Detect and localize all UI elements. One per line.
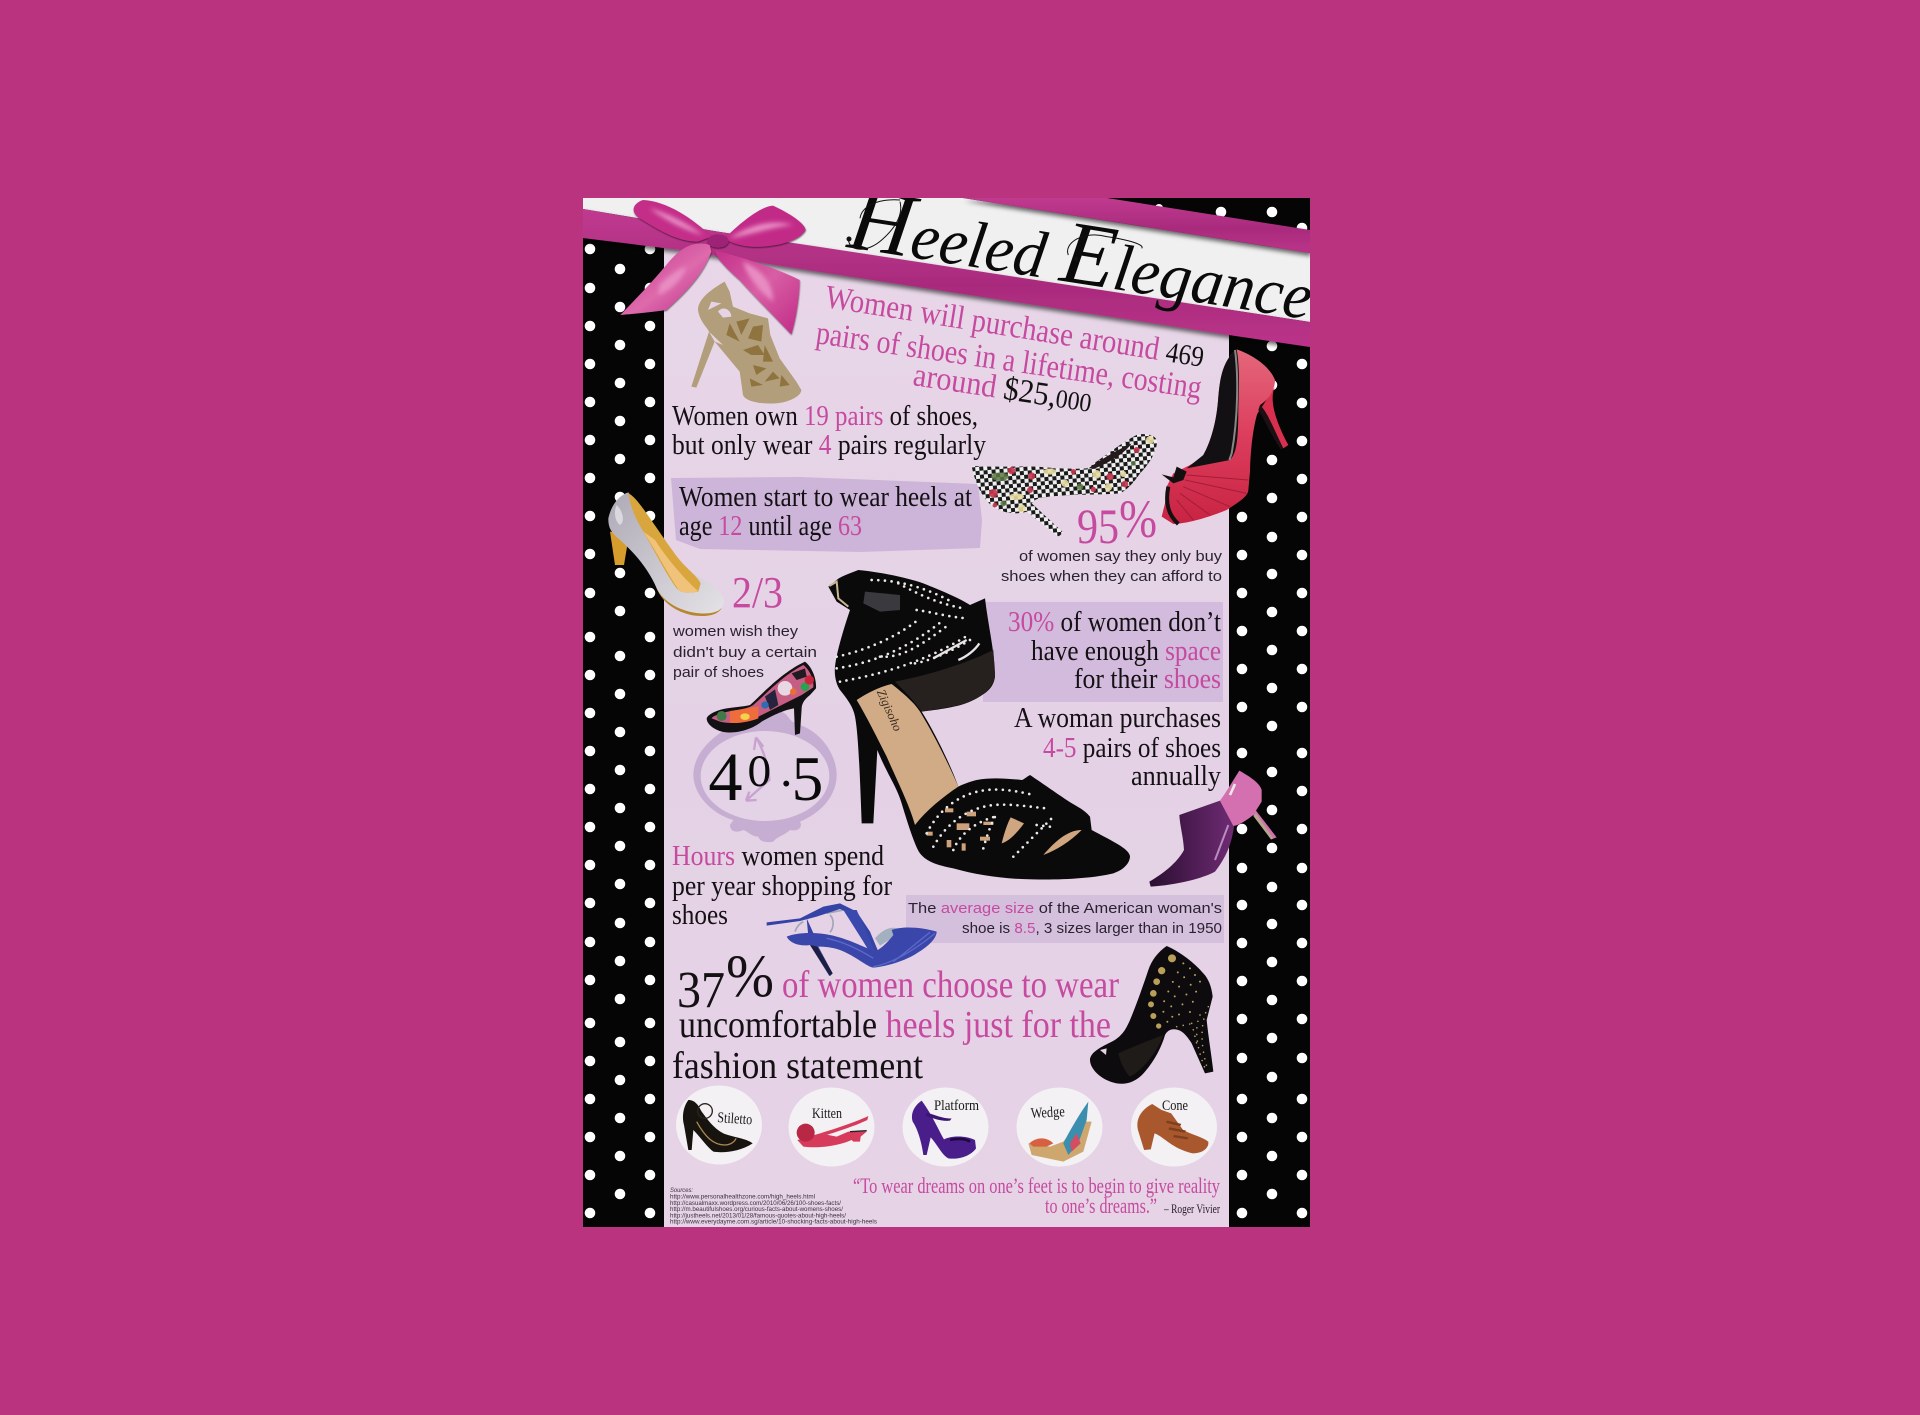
text: lifetime purchase	[814, 279, 1207, 420]
tan insole	[857, 684, 958, 825]
title flourishes	[847, 200, 1142, 261]
caption: afford	[1001, 548, 1223, 585]
silver toe opening	[875, 928, 897, 946]
label: Cone: Cone	[1162, 1098, 1188, 1114]
sources	[670, 1188, 877, 1226]
text: average size: The average size of the American woman's	[908, 900, 1222, 917]
lower ribbon	[583, 209, 1310, 347]
text: annual purchases: 4-5 pairs of shoes	[1043, 733, 1221, 764]
polka dot backing	[583, 198, 1310, 1227]
caption: regret: didn't buy a certain	[673, 644, 817, 661]
line two: uncomfortable heels just for the	[679, 1004, 1111, 1046]
text: not enough space: 30% of women don’t	[1008, 607, 1221, 638]
line three: fashion statement	[672, 1045, 923, 1087]
text: 37% fashion statement	[672, 943, 1119, 1087]
quote: – Roger Vivier	[1163, 1201, 1220, 1216]
shoe body	[1162, 349, 1275, 524]
right bow loop	[725, 206, 806, 247]
shoe: stiletto	[683, 1100, 753, 1152]
shoe: cone	[1137, 1104, 1208, 1153]
text: average size	[908, 900, 1222, 937]
stat: 40.5: .	[780, 741, 792, 797]
left bow tail	[620, 244, 711, 315]
stat: 40.5: 5	[792, 744, 823, 814]
sources: http://m.beautifulshoes.org/curious-facts-about-womens-shoes/	[670, 1207, 843, 1213]
stat: 37: 37	[677, 962, 725, 1019]
poster	[583, 169, 1321, 1227]
toe openings	[1002, 817, 1082, 855]
caption: afford: of women say they only buy	[1019, 548, 1223, 565]
text: not enough space	[1008, 607, 1221, 695]
shoe: large black studded sandal	[828, 570, 1130, 879]
lilac arrows	[746, 737, 769, 801]
text: lifetime purchase: Women will purchase around 469	[823, 279, 1207, 375]
shoe: kitten	[797, 1116, 868, 1147]
stat: 2/3: 2/3	[732, 568, 783, 617]
text: annual purchases: A woman purchases	[1014, 703, 1221, 734]
text: lifetime purchase: pairs of shoes in a lifetime, costing	[814, 315, 1204, 406]
left bow loop	[634, 200, 711, 242]
shoe: platform	[912, 1101, 976, 1159]
text: lifetime purchase: around $25,000	[911, 357, 1094, 420]
label: Wedge: Wedge	[1030, 1104, 1065, 1122]
insole brand: Zigisoho	[874, 687, 905, 733]
strap and buckle wire	[795, 910, 843, 932]
ornate frame	[693, 711, 837, 842]
silver upper	[608, 492, 724, 613]
text: hours shopping: Hours women spend	[672, 841, 884, 872]
stat: 95%: %	[1119, 489, 1157, 549]
quote	[853, 1173, 1220, 1218]
stat: 2/3	[672, 568, 817, 681]
text: hours shopping	[672, 841, 893, 931]
text: pairs owned	[672, 401, 986, 461]
heel type: wedge	[1016, 1088, 1102, 1166]
text: hours shopping: per year shopping for	[672, 871, 893, 902]
shoe: black studded pump	[1090, 946, 1213, 1084]
badge: ornate lilac frame with 40.5	[693, 711, 837, 842]
text: wearing age: age 12 until age 63	[679, 511, 862, 542]
title: Heeled Elegance	[842, 169, 1321, 339]
shoe: purple ankle boot	[1149, 771, 1277, 887]
gold studs	[1148, 954, 1176, 1029]
central lilac panel	[664, 240, 1229, 1227]
sources: Sources:	[670, 1188, 693, 1194]
heel type: cone	[1131, 1088, 1217, 1166]
shoe: silver pump	[608, 492, 724, 616]
text: annual purchases: annually	[1131, 761, 1221, 792]
sources: http://www.everydayme.com.sg/article/10-shocking-facts-about-high-heels	[670, 1220, 877, 1226]
stat: percent sign: %	[726, 943, 774, 1009]
buckle	[829, 582, 848, 607]
caption: afford: shoes when they can afford to	[1001, 568, 1222, 585]
sources: http://justheels.net/2013/01/28/famous-quotes-about-high-heels/	[670, 1214, 846, 1220]
toe edge and bow	[1167, 487, 1178, 524]
stat: 95%: 95	[1077, 498, 1127, 554]
text: wearing age	[679, 482, 972, 542]
heel type: kitten	[788, 1088, 874, 1166]
bow knot	[707, 234, 729, 248]
heel type: stiletto	[676, 1086, 762, 1164]
text: wearing age: Women start to wear heels at	[679, 482, 972, 513]
shoe: floral pump	[707, 662, 816, 735]
sources: http://www.personalhealthzone.com/high_heels.html	[670, 1194, 815, 1200]
shoe: wedge	[1028, 1102, 1092, 1162]
text: not enough space: for their shoes	[1074, 664, 1221, 695]
toe pleats	[1177, 475, 1248, 520]
mesh back	[895, 650, 995, 712]
rhinestones	[837, 580, 1053, 857]
bow sheen	[650, 208, 793, 302]
stat: 40.5: 0	[747, 750, 772, 796]
highlight band: start age	[671, 477, 982, 552]
highlight band: space	[983, 602, 1223, 702]
text: average size: shoe is 8.5, 3 sizes larger than in 1950	[962, 920, 1222, 937]
heel type: platform	[902, 1088, 988, 1166]
highlight band: average size	[906, 895, 1224, 943]
icon: pink bow	[620, 200, 806, 334]
label: Stiletto: Stiletto	[717, 1110, 753, 1128]
title	[845, 198, 1310, 318]
text: pairs owned: Women own 19 pairs of shoes,	[672, 401, 978, 432]
stat: 40.5: 4	[708, 739, 743, 815]
text: pairs owned: but only wear 4 pairs regularly	[672, 430, 986, 461]
red heel	[1253, 387, 1288, 448]
text: hours shopping: shoes	[672, 900, 728, 931]
caption: regret: women wish they	[672, 623, 799, 640]
title ribbon	[583, 198, 1310, 347]
text: not enough space: have enough space	[1031, 636, 1221, 667]
shoe: checked floral pump	[972, 434, 1157, 537]
caption: regret: pair of shoes	[673, 664, 764, 681]
black lining	[1187, 349, 1239, 468]
sources: http://casualmaxx.wordpress.com/2010/06/26/100-shoes-facts/	[670, 1201, 841, 1207]
text: annual purchases	[1014, 703, 1221, 792]
line one: of women choose to wear	[782, 964, 1119, 1006]
shoe: red peep toe	[1162, 349, 1288, 524]
label: Kitten: Kitten	[812, 1106, 842, 1122]
gold insole	[628, 493, 701, 593]
sole and vamp	[787, 928, 937, 976]
shoe: blue satin sandal	[767, 903, 937, 976]
white title banner	[583, 198, 1310, 322]
upper ribbon	[963, 198, 1310, 253]
label: Platform: Platform	[934, 1098, 979, 1114]
quote: to one’s dreams.”	[1045, 1193, 1157, 1218]
shoe: tan caged heel	[691, 282, 801, 404]
quote: “To wear dreams on one’s feet is to begin to give reality	[853, 1173, 1220, 1198]
caption: regret	[672, 623, 817, 681]
right bow tail	[715, 250, 800, 334]
gold heel	[610, 532, 627, 565]
stat: 95%	[1001, 489, 1223, 585]
